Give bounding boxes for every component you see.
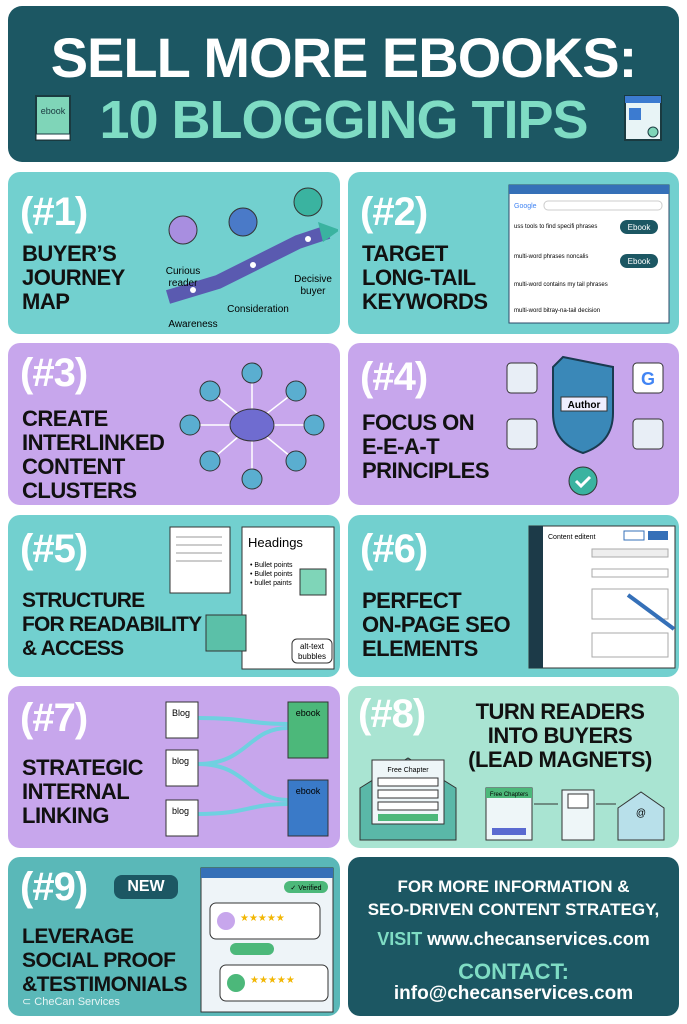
brand label: ⊂ CheCan Services bbox=[22, 996, 120, 1008]
panel: tip 1: MAP bbox=[22, 289, 69, 314]
panel: tip 9 bbox=[8, 857, 340, 1016]
search results mockup: multi-word contains my tail phrases bbox=[514, 282, 608, 288]
title line 1: SELL MORE EBOOKS: bbox=[51, 26, 636, 89]
linking diagram: ebook bbox=[296, 708, 321, 718]
EEAT shield illustration bbox=[506, 356, 664, 496]
testimonials mockup: ★★★★★ bbox=[240, 913, 285, 924]
panel: tip 9: SOCIAL PROOF bbox=[22, 949, 175, 972]
panel: tip 2: (#2) bbox=[360, 190, 427, 234]
icon: ebook bbox=[35, 95, 71, 141]
document illustration: • Bullet points bbox=[250, 571, 293, 578]
panel: tip 1 bbox=[8, 172, 340, 334]
contact text: SEO-DRIVEN CONTENT STRATEGY, bbox=[368, 900, 659, 919]
journey illustration: buyer bbox=[300, 286, 326, 297]
panel: tip 3: CONTENT bbox=[22, 454, 125, 479]
testimonials mockup: ✓ Verified bbox=[290, 885, 322, 892]
panel: tip 9: &TESTIMONIALS bbox=[22, 973, 187, 996]
document illustration bbox=[170, 526, 334, 670]
title panel bbox=[8, 6, 679, 162]
journey illustration bbox=[166, 188, 338, 330]
panel: tip 5 bbox=[8, 515, 340, 677]
panel: tip 7: STRATEGIC bbox=[22, 755, 143, 780]
panel: contact: CONTACT: bbox=[458, 959, 569, 984]
panel: tip 4 bbox=[348, 343, 679, 505]
panel: tip 1: (#1) bbox=[20, 190, 87, 234]
journey illustration: Awareness bbox=[168, 319, 218, 330]
panel: tip 7: (#7) bbox=[20, 696, 87, 740]
contact text: FOR MORE INFORMATION & bbox=[398, 877, 630, 896]
panel: tip 1: BUYER’S bbox=[22, 241, 116, 266]
icon: browser bbox=[624, 95, 662, 141]
icon: ebook: ebook bbox=[41, 106, 66, 116]
document illustration: Headings bbox=[248, 535, 303, 550]
panel: tip 6: PERFECT bbox=[362, 588, 461, 613]
cluster diagram bbox=[180, 362, 324, 490]
panel: tip 7 bbox=[8, 686, 340, 848]
panel: tip 3: (#3) bbox=[20, 351, 87, 395]
search results mockup: Ebook bbox=[628, 223, 651, 232]
panel: contact: info@checanservices.com bbox=[394, 983, 633, 1004]
panel: tip 5: & ACCESS bbox=[22, 637, 123, 660]
journey illustration: Decisive bbox=[294, 274, 332, 285]
search results mockup bbox=[508, 184, 670, 324]
search results mockup: Google bbox=[514, 203, 537, 210]
title line 2: 10 BLOGGING TIPS bbox=[99, 90, 588, 150]
panel: tip 3: CLUSTERS bbox=[22, 478, 137, 503]
testimonials mockup bbox=[200, 868, 334, 1012]
panel: tip 8 bbox=[348, 686, 679, 848]
panel: contact bbox=[348, 857, 679, 1016]
badge: NEW bbox=[114, 875, 178, 899]
testimonials mockup: ★★★★★ bbox=[250, 975, 295, 986]
linking diagram: blog bbox=[172, 806, 189, 816]
panel: tip 6: ON-PAGE SEO bbox=[362, 612, 510, 637]
document illustration: • Bullet points bbox=[250, 562, 293, 569]
panel: tip 4: (#4) bbox=[360, 355, 427, 399]
linking diagram: ebook bbox=[296, 786, 321, 796]
document illustration: alt-text bbox=[300, 642, 325, 651]
panel: tip 3 bbox=[8, 343, 340, 505]
badge: NEW: NEW bbox=[127, 878, 165, 895]
journey illustration: reader bbox=[169, 278, 198, 289]
panel: tip 2: LONG-TAIL bbox=[362, 265, 476, 290]
document illustration: • bullet paints bbox=[250, 580, 292, 587]
panel: tip 7: LINKING bbox=[22, 803, 109, 828]
search results mockup: multi-word phrases noncalis bbox=[514, 254, 588, 260]
panel: tip 8: INTO BUYERS bbox=[488, 723, 632, 748]
search results mockup: multi-word bitray-na-tail decision bbox=[514, 308, 600, 314]
search results mockup: Ebook bbox=[628, 257, 651, 266]
CMS editor mockup: Content editent bbox=[548, 534, 596, 541]
panel: tip 9: (#9) bbox=[20, 865, 87, 909]
lead magnet flow: @ bbox=[636, 808, 646, 819]
panel: tip 4: E-E-A-T bbox=[362, 434, 439, 459]
panel: contact: VISIT www.checanservices.com bbox=[377, 929, 650, 949]
panel: tip 7: INTERNAL bbox=[22, 779, 129, 804]
lead magnet flow: Free Chapter bbox=[387, 767, 429, 774]
panel: tip 8: (#8) bbox=[358, 692, 425, 736]
journey illustration: Consideration bbox=[227, 304, 289, 315]
linking diagram: Blog bbox=[172, 708, 190, 718]
search results mockup: uss tools to find specifi phrases bbox=[514, 224, 597, 230]
panel: tip 5: (#5) bbox=[20, 527, 87, 571]
document illustration: bubbles bbox=[298, 652, 326, 661]
panel: tip 3: INTERLINKED bbox=[22, 430, 164, 455]
lead magnet flow bbox=[360, 757, 664, 840]
EEAT shield illustration: Author bbox=[568, 400, 600, 411]
panel: tip 3: CREATE bbox=[22, 406, 108, 431]
panel: tip 4: FOCUS ON bbox=[362, 410, 474, 435]
panel: tip 2 bbox=[348, 172, 679, 334]
CMS editor mockup bbox=[528, 526, 676, 668]
panel: tip 2: TARGET bbox=[362, 241, 448, 266]
journey illustration: Curious bbox=[166, 266, 200, 277]
panel: tip 6: ELEMENTS bbox=[362, 636, 478, 661]
lead magnet flow: Free Chapters bbox=[490, 792, 528, 798]
panel: tip 8: (LEAD MAGNETS) bbox=[468, 747, 652, 772]
panel: tip 5: FOR READABILITY bbox=[22, 613, 201, 636]
panel: tip 5: STRUCTURE bbox=[22, 589, 144, 612]
EEAT shield illustration: G bbox=[641, 369, 655, 389]
panel: tip 6: (#6) bbox=[360, 527, 427, 571]
panel: tip 2: KEYWORDS bbox=[362, 289, 488, 314]
linking diagram bbox=[166, 702, 328, 836]
linking diagram: blog bbox=[172, 756, 189, 766]
contact text bbox=[368, 877, 659, 919]
panel: tip 6 bbox=[348, 515, 679, 677]
panel: tip 9: LEVERAGE bbox=[22, 925, 134, 948]
panel: tip 1: JOURNEY bbox=[22, 265, 125, 290]
panel: tip 8: TURN READERS bbox=[476, 699, 644, 724]
panel: tip 4: PRINCIPLES bbox=[362, 458, 489, 483]
